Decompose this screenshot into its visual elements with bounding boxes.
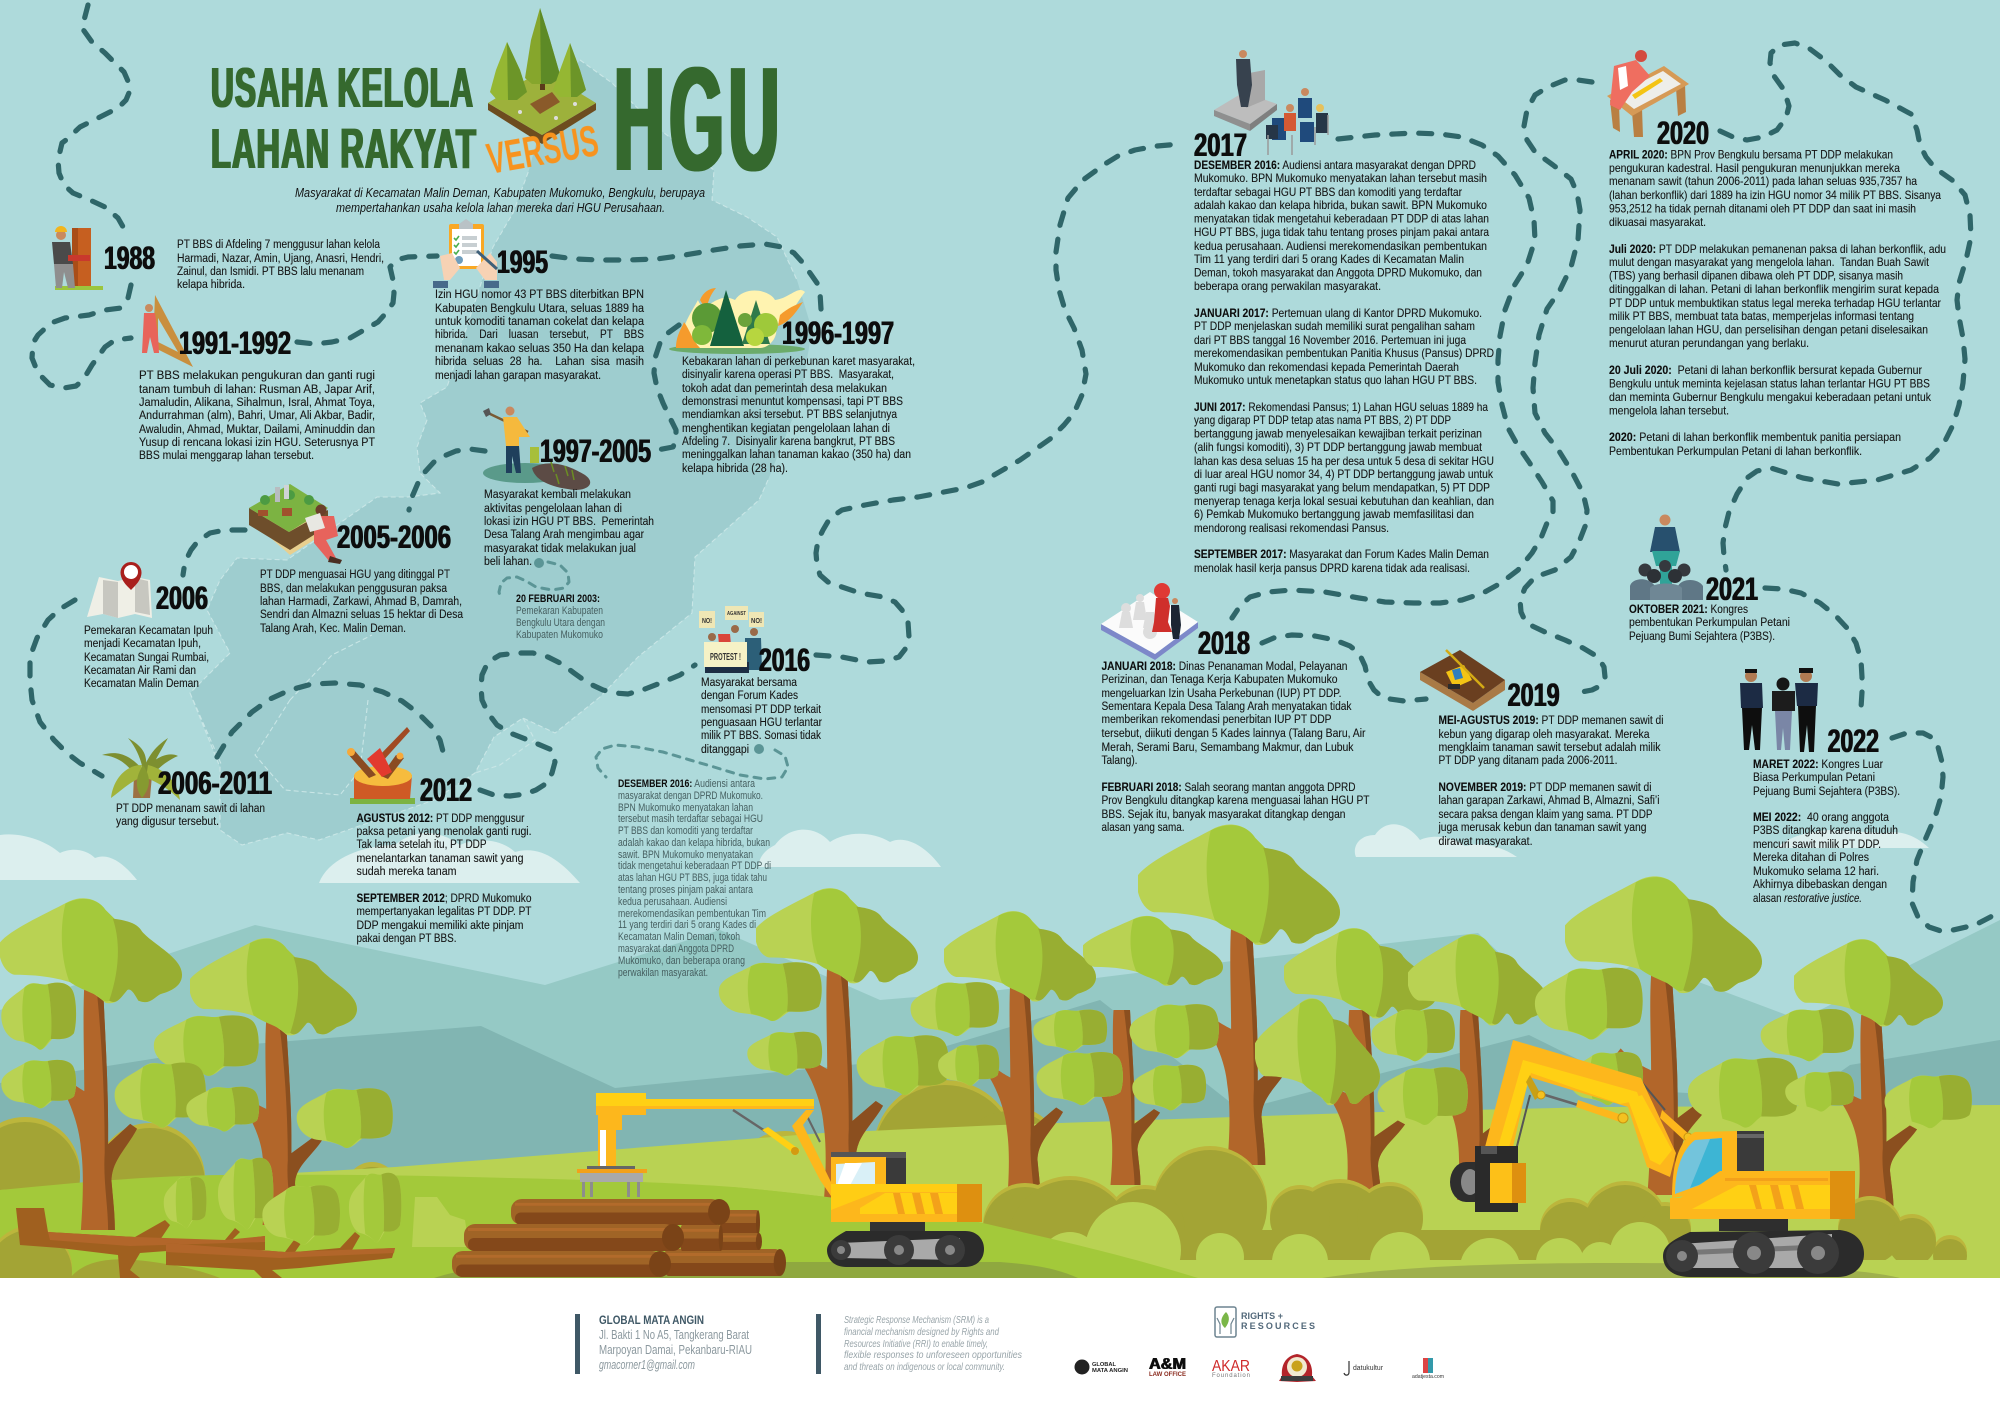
text block: yang digusur tersebut. — [116, 814, 219, 828]
text block: aktivitas pengelolaan lahan di — [484, 501, 622, 515]
note: 20 februari 2003: Kabupaten Mukomuko — [516, 629, 603, 641]
text block: Deman, tokoh masyarakat dan Anggota DPRD Mukomuko, dan — [1194, 266, 1482, 280]
text block: Jamaludin, Alikana, Sihalmun, Isral, Ahmat Toya, — [139, 395, 375, 409]
year heading: 2006-2011 — [158, 765, 272, 801]
text block — [1102, 659, 1370, 834]
text block: secara paksa dengan klaim yang sama. PT DDP — [1438, 807, 1652, 821]
text block: dirawat masyarakat. — [1438, 834, 1532, 848]
note: desember 2016: atas lahan HGU PT BBS, juga tidak tahu — [618, 872, 767, 884]
text block: DDP mengakui memiliki akte pinjam — [356, 918, 524, 932]
text block: Sementara Kepala Desa Talang Arah menyatakan tidak — [1102, 699, 1352, 713]
footer: SRM note: flexible responses to unforeseen opportunities — [844, 1349, 1023, 1361]
year heading: 2005-2006 — [337, 519, 451, 555]
panel: 2022 — [1740, 668, 1900, 905]
year heading: 1997-2005 — [540, 433, 651, 469]
icon: chess board with businessman — [1101, 583, 1198, 660]
footer: contact: Marpoyan Damai, Pekanbaru-RIAU — [599, 1343, 752, 1357]
text block: Talang). — [1102, 753, 1138, 767]
text block: alasan restorative justice. — [1753, 891, 1862, 905]
panel: 2020 — [1607, 50, 1946, 458]
front bushes — [0, 1146, 2000, 1314]
text block: OKTOBER 2021: Kongres — [1629, 602, 1748, 616]
text block: AGUSTUS 2012: PT DDP menggusur — [356, 811, 524, 825]
text block: Masyarakat bersama — [701, 675, 797, 689]
text block: PT BBS melakukan pengukuran dan ganti rugi — [139, 368, 375, 382]
text block: NOVEMBER 2019: PT DDP memanen sawit di — [1438, 780, 1652, 794]
year heading: 2016 — [759, 642, 810, 678]
text block — [1629, 602, 1790, 643]
text block: kelapa hibrida. — [177, 277, 245, 291]
panel: 2006 — [84, 562, 213, 690]
logo: datukultur — [1344, 1361, 1384, 1375]
icon: police arresting farmer — [1740, 668, 1818, 752]
note: desember 2016: adalah kakao dan kelapa hibrida, bukan — [618, 837, 770, 849]
text block: demonstrasi menuntut kompensasi, tapi PT BBS — [682, 394, 903, 408]
hills — [0, 1105, 2000, 1278]
panel: 2012 — [347, 727, 532, 945]
text block: di luar areal HGU nomor 34, 4) PT DDP bertanggung jawab untuk — [1194, 467, 1493, 481]
text block: alasan yang sama. — [1102, 820, 1184, 834]
text block: pengukuran kadestral. Hasil pengukuran menunjukkan mereka — [1609, 161, 1900, 175]
panel: 1988 — [52, 226, 384, 291]
text block: mensomasi PT DDP terkait — [701, 702, 821, 716]
note: desember 2016: DESEMBER 2016: Audiensi antara — [618, 778, 756, 790]
text block — [1609, 148, 1946, 458]
icon: speaker on podium with audience — [1214, 50, 1328, 155]
text block: menyerap tenaga kerja lokal sesuai kebutuhan dan keahlian, dan — [1194, 494, 1494, 508]
text block: beli lahan. — [484, 554, 532, 568]
text block: mengklaim tanaman sawit tersebut adalah milik — [1438, 740, 1661, 754]
text block: (alih fungsi komoditi), 3) PT DDP bertanggung jawab membuat — [1194, 440, 1483, 454]
icon: burning forest — [669, 288, 805, 354]
text block — [84, 623, 213, 690]
text block: Zainul, dan Ismidi. PT BBS lalu menanam — [177, 264, 364, 278]
subtitle: mempertahankan usaha kelola lahan mereka dari HGU Perusahaan. — [336, 200, 665, 215]
text block: beberapa orang perwakilan masyarakat. — [1194, 279, 1381, 293]
panel: 2017 — [1194, 50, 1494, 575]
icon: surveyor at drafting table — [1607, 50, 1689, 137]
mountains — [0, 920, 2000, 1200]
text block: Kecamatan Malin Deman — [84, 676, 199, 690]
text block: Kabupaten Bengkulu Utara, seluas 1889 ha — [435, 301, 644, 315]
icon: protesters with signs — [699, 606, 764, 673]
text block: yang digarap PT DDP tetap atas nama PT BBS, 2) PT DDP — [1194, 413, 1451, 427]
text block: dan meminta Gubernur Bengkulu mengakui keberadaan petani untuk — [1609, 390, 1931, 404]
heading: usaha kelola lahan rakyat: USAHA KELOLA — [211, 56, 474, 120]
footer: SRM note: Strategic Response Mechanism (SRM) is a — [844, 1314, 989, 1326]
text block: merekomendasikan pembentukan Panitia Khusus (Pansus) DPRD — [1194, 346, 1494, 360]
panel: 1997-2005 — [483, 406, 654, 641]
text block: Mukomuko dan rekomendasi kepada Pemerintah Daerah — [1194, 360, 1459, 374]
text block — [177, 237, 384, 291]
icon: map with pin — [87, 562, 152, 618]
footer background — [0, 1278, 2000, 1414]
text block: 953,2512 ha tidak pernah ditanami oleh PT DDP dan saat ini masih — [1609, 202, 1916, 216]
logo: global mata angin: MATA ANGIN — [1092, 1368, 1128, 1374]
note: desember 2016: BPN Mukomuko menyatakan lahan — [618, 802, 753, 814]
back bushes — [0, 1080, 1213, 1243]
text block: 2020: Petani di lahan berkonflik membentuk panitia persiapan — [1609, 430, 1901, 444]
text block: pakai dengan PT BBS. — [356, 931, 456, 945]
text block: BBS, dan melakukan penggusuran paksa — [260, 581, 447, 595]
panel: 1996-1997 — [669, 288, 915, 475]
text block — [435, 287, 644, 382]
panel: 2006-2011 — [102, 738, 272, 828]
note: desember 2016: merekomendasikan pembentukan Tim — [618, 908, 766, 920]
subtitle — [295, 185, 705, 215]
text block: Pemekaran Kecamatan Ipuh — [84, 623, 213, 637]
text block: Juli 2020: PT DDP melakukan pemanenan paksa di lahan berkonflik, adu — [1609, 242, 1946, 256]
logo: adatjesta — [1412, 1358, 1444, 1380]
text block: JANUARI 2018: Dinas Penanaman Modal, Pelayanan — [1102, 659, 1348, 673]
text block: menghentikan kegiatan pengelolaan lahan di — [682, 421, 890, 435]
text block: 20 Juli 2020: Petani di lahan berkonflik bersurat kepada Gubernur — [1609, 363, 1922, 377]
text block: Mukomuko. BPN Mukomuko menyatakan lahan tersebut masih — [1194, 171, 1487, 185]
text block: Tak lama setelah itu, PT DDP — [356, 837, 486, 851]
year heading: 2017 — [1194, 127, 1247, 163]
note: desember 2016: kedua perusahaan. Audiensi — [618, 896, 727, 908]
text block — [260, 567, 463, 635]
footer: contact: Jl. Bakti 1 No A5, Tangkerang Barat — [599, 1328, 749, 1342]
year heading: 2021 — [1706, 571, 1758, 607]
text block: lahan Harmadi, Zarkawi, Ahmad B, Damrah, — [260, 594, 462, 608]
text block: memberikan rekomendasi penerbitan IUP PT DDP — [1102, 712, 1332, 726]
panel: 1995 — [433, 219, 644, 382]
year heading: 2018 — [1198, 625, 1250, 661]
subtitle: Masyarakat di Kecamatan Malin Deman, Kabupaten Mukomuko, Bengkulu, berupaya — [295, 185, 705, 200]
text block: Pejuang Bumi Sejahtera (P3BS). — [1753, 784, 1900, 798]
logo: global mata angin: GLOBAL — [1092, 1362, 1117, 1368]
title — [211, 8, 784, 215]
text block: tanam tumbuh di lahan: Rusman AB, Japar Arif, — [139, 382, 375, 396]
text block: tersebut, diikuti dengan 5 Kades lainnya (Talang Baru, Air — [1102, 726, 1366, 740]
panel: 2005-2006 — [249, 484, 463, 635]
logo: akar foundation: Foundation — [1212, 1373, 1250, 1379]
note: desember 2016: perwakilan masyarakat. — [618, 967, 708, 979]
icon: clipboard held in hands — [433, 219, 499, 288]
text block: PT DDP menguasai HGU yang ditinggal PT — [260, 567, 450, 581]
text block: FEBRUARI 2018: Salah seorang mantan anggota DPRD — [1102, 780, 1356, 794]
logo: rights and resources: RESOURCES — [1241, 1321, 1315, 1331]
text block: menanam sawit (tahun 2006-2011) pada lahan seluas 935,7357 ha — [1609, 174, 1917, 188]
text block: penguasaan HGU terlantar — [701, 715, 822, 729]
note: desember 2016: sawit. BPN Mukomuko menyatakan — [618, 849, 753, 861]
panel: 1991-1992 — [139, 295, 375, 462]
forest mulcher excavator — [1450, 1040, 1864, 1277]
icon: protesters with signs: NO! — [751, 618, 762, 625]
text block: pembentukan Perkumpulan Petani — [1629, 615, 1790, 629]
logo: a&m law office: LAW OFFICE — [1149, 1372, 1186, 1378]
note: desember 2016 — [618, 778, 771, 979]
text block — [356, 811, 532, 945]
text block: Pembentukan Perkumpulan Petani di lahan berkonflik. — [1609, 444, 1862, 458]
text block: BBS. Sejak itu, banyak masyarakat ditangkap dengan — [1102, 807, 1346, 821]
note: 20 februari 2003: Bengkulu Utara dengan — [516, 617, 605, 629]
year heading: 1988 — [104, 240, 155, 276]
footer: SRM note — [816, 1314, 1023, 1374]
text block: Tim 11 yang terdiri dari 5 orang Kades di Kecamatan Malin — [1194, 252, 1464, 266]
logo: adatjesta: adatjesta.com — [1412, 1374, 1444, 1380]
text block: Izin HGU nomor 43 PT BBS diterbitkan BPN — [435, 287, 644, 301]
text block: Kebakaran lahan di perkebunan karet masyarakat, — [682, 354, 915, 368]
note: desember 2016: tersebut masih terdaftar sebagai HGU — [618, 813, 763, 825]
text block — [484, 487, 654, 568]
text block: menjadi lahan garapan masyarakat. — [435, 368, 601, 382]
text block: HGU PT BBS, juga tidak tahu tentang proses pinjam pakai antara — [1194, 225, 1489, 239]
text block: disinyalir karena operasi PT BBS. Masyarakat, — [682, 367, 894, 381]
text block — [682, 354, 915, 475]
icon: surveyor with set square — [142, 295, 193, 367]
note: 20 februari 2003 — [516, 593, 605, 641]
text block: dari PT BBS tanggal 16 November 2016. Pertemuan ini juga — [1194, 333, 1466, 347]
text block: lahan garapan Zarkawi, Ahmad B, Almazni, Safi’i — [1438, 793, 1660, 807]
icon: protesters with signs: NO! — [702, 618, 712, 625]
text block: PT DDP yang ditanam pada 2006-2011. — [1438, 753, 1618, 767]
text block: Mereka ditahan di Polres — [1753, 850, 1869, 864]
footer: contact: GLOBAL MATA ANGIN — [599, 1313, 704, 1327]
text block: Mukomuko untuk menetapkan status quo lahan HGU PT BBS. — [1194, 373, 1477, 387]
logo: datukultur: datukultur — [1353, 1365, 1384, 1372]
icon: palm tree — [102, 738, 180, 800]
text block: menurut aturan perundangan yang berlaku. — [1609, 336, 1809, 350]
text block: milik PT BBS, membuat tata batas, memperjelas informasi tentang — [1609, 309, 1914, 323]
icon: isometric land with surveyor — [249, 484, 342, 564]
text block: PT DDP menjelaskan sudah memiliki surat pengalihan saham — [1194, 319, 1475, 333]
logo: badge — [1279, 1354, 1316, 1382]
text block: lahan kas desa seluas 15 ha per desa untuk 5 desa di sekitar HGU — [1194, 454, 1494, 468]
note: 20 februari 2003: 20 FEBRUARI 2003: — [516, 593, 600, 605]
logo: a&m law office: A&M — [1149, 1356, 1186, 1373]
text block: mempertanyakan legalitas PT DDP. PT — [356, 904, 532, 918]
logo: rights and resources: RIGHTS + — [1241, 1311, 1283, 1321]
text block: kebun yang digarap oleh masyarakat. Mereka — [1438, 727, 1650, 741]
text block: Merah, Serami Baru, Semambang Makmur, dan Lubuk — [1102, 740, 1354, 754]
clouds — [0, 824, 1929, 883]
text block: PT BBS di Afdeling 7 menggusur lahan kelola — [177, 237, 380, 251]
footer: contact — [575, 1313, 752, 1374]
note: desember 2016: PT BBS dan komoditi yang terdaftar — [618, 825, 753, 837]
icon: farmer with hoe — [483, 406, 590, 490]
text block — [116, 801, 265, 828]
note: desember 2016: Mukomuko, dan beberapa orang — [618, 955, 745, 967]
text block: Mukomuko selama 12 hari. — [1753, 864, 1879, 878]
text block: juga merusak kebun dan tanaman sawit yang — [1438, 820, 1646, 834]
text block: Talang Arah, Kec. Malin Deman. — [260, 621, 406, 635]
fallen trees — [16, 1158, 469, 1278]
year heading: 2020 — [1657, 115, 1709, 151]
text block: masyarakat tidak melakukan jual — [484, 541, 636, 555]
trees — [0, 824, 1972, 1230]
text block: pengelolaan lahan HGU, dan perselisihan dengan petani diselesaikan — [1609, 322, 1928, 336]
text block: adalah kakao dan kelapa hibrida, bukan sawit. BPN Mukomuko — [1194, 198, 1487, 212]
text block — [1194, 158, 1494, 575]
icon: speaker and audience — [1630, 514, 1703, 600]
text block: dengan Forum Kades — [701, 688, 798, 702]
text block: MARET 2022: Kongres Luar — [1753, 757, 1883, 771]
text block: Afdeling 7. Disinyalir karena bangkrut, PT BBS — [682, 434, 895, 448]
text block: BBS mulai menggarap lahan tersebut. — [139, 448, 314, 462]
year heading: 2006 — [156, 580, 208, 616]
footer: SRM note: financial mechanism designed by Rights and — [844, 1326, 1000, 1338]
text block: Desa Talang Arah mengimbau agar — [484, 527, 644, 541]
text block: SEPTEMBER 2012; DPRD Mukomuko — [356, 891, 532, 905]
text block — [701, 675, 822, 756]
text block: PT DDP menanam sawit di lahan — [116, 801, 265, 815]
text: HGU — [614, 37, 784, 202]
logo: rights and resources — [1215, 1307, 1315, 1337]
text block: kelapa hibrida (28 ha). — [682, 461, 788, 475]
note: 20 februari 2003: Pemekaran Kabupaten — [516, 605, 603, 617]
icon: worker cutting tree — [52, 226, 103, 290]
icon: axe in tree stump — [347, 727, 415, 804]
map silhouette of Bengkulu — [190, 60, 812, 845]
text block: Kecamatan Sungai Rumbai, — [84, 650, 209, 664]
year heading: 1995 — [497, 244, 548, 280]
text block: Bengkulu untuk meminta kejelasan status lahan terlantar HGU PT BBS — [1609, 376, 1930, 390]
text block: DESEMBER 2016: Audiensi antara masyarakat dengan DPRD — [1194, 158, 1476, 172]
text block: Andurrahman (alm), Bahri, Umar, Ali Akbar, Badir, — [139, 408, 375, 422]
note: desember 2016: Kecamatan Malin Deman, tokoh — [618, 931, 740, 943]
text block: bertanggung jawab menyelesaikan kewajiban terkait perizinan — [1194, 426, 1482, 440]
heading: usaha kelola lahan rakyat — [211, 56, 477, 181]
text block: Yusup di rencana lokasi izin HGU. Seterusnya PT — [139, 435, 375, 449]
icon: forest island — [488, 8, 596, 144]
text block: hibrida seluas 28 ha. Lahan sisa masih — [435, 354, 644, 368]
text block: Prov Bengkulu ditangkap karena menguasai lahan HGU PT — [1102, 793, 1370, 807]
text block: menjadi Kecamatan Ipuh, — [84, 636, 201, 650]
text block: ganti rugi bagi masyarakat yang belum mendapatkan, 5) PT DDP — [1194, 480, 1490, 494]
text block: MEI-AGUSTUS 2019: PT DDP memanen sawit di — [1438, 713, 1664, 727]
text block: menanam kakao seluas 350 Ha dan kelapa — [435, 341, 644, 355]
pile of logs — [452, 1199, 786, 1277]
panel: 2018 — [1101, 583, 1370, 834]
text block: paksa petani yang menolak ganti rugi. — [356, 824, 532, 838]
year heading: 2022 — [1828, 723, 1879, 759]
year heading: 1996-1997 — [782, 315, 894, 351]
year heading: 2019 — [1508, 677, 1560, 713]
text block: mencuri sawit milik PT DDP. — [1753, 837, 1881, 851]
heading: usaha kelola lahan rakyat: LAHAN RAKYAT — [211, 117, 477, 181]
text block: 6) Pemkab Mukomuko bertanggung jawab memfasilitasi dan — [1194, 507, 1474, 521]
text block — [1753, 757, 1900, 905]
panel: 2016 — [618, 606, 822, 979]
note: desember 2016: masyarakat dengan DPRD Mukomuko. — [618, 790, 763, 802]
text block: Pejuang Bumi Sejahtera (P3BS). — [1629, 629, 1775, 643]
text block: mendiamkan aksi tersebut. PT BBS selanjutnya — [682, 407, 897, 421]
text block — [139, 368, 375, 462]
footer: contact: gmacorner1@gmail.com — [599, 1358, 695, 1372]
text block: (TBS) yang berhasil dipanen dibawa oleh PT DDP, sisanya masih — [1609, 268, 1903, 282]
panel: 2021 — [1629, 514, 1790, 643]
text block: tokoh adat dan pemerintah desa melakukan — [682, 381, 887, 395]
note: desember 2016: masyarakat dan Anggota DPRD — [618, 943, 734, 955]
text block: menelantarkan tanaman sawit yang — [356, 851, 524, 865]
text block: Kecamatan Air Rami dan — [84, 663, 196, 677]
text block: mengelola lahan tersebut. — [1609, 404, 1729, 418]
text block: milik PT BBS. Somasi tidak — [701, 728, 822, 742]
text block: Harmadi, Nazar, Amin, Ujang, Anasri, Hendri, — [177, 251, 384, 265]
year heading: 2012 — [420, 772, 472, 808]
logo: global mata angin — [1074, 1360, 1128, 1374]
text block: mulut dengan masyarakat yang mengelola lahan. Tandan Buah Sawit — [1609, 255, 1930, 269]
panel: 2019 — [1420, 650, 1664, 848]
text block: Sendri dan Almazni seluas 15 hektar di Desa — [260, 607, 463, 621]
text block: mendorong realisasi rekomendasi Pansus. — [1194, 521, 1389, 535]
log loader excavator — [577, 1093, 984, 1267]
dashed timeline path — [30, 5, 2000, 931]
text block: P3BS ditangkap karena dituduh — [1753, 823, 1898, 837]
text block: Awaludin, Ahmad, Muktar, Dailami, Aminuddin dan — [139, 422, 375, 436]
note: desember 2016: 11 yang terdiri dari 5 orang Kades di — [618, 919, 756, 931]
icon: protesters with signs: AGAINST — [727, 611, 746, 617]
note: desember 2016: tentang proses pinjam pakai antara — [618, 884, 754, 896]
text block: Akhirnya dibebaskan dengan — [1753, 877, 1887, 891]
text block: MEI 2022: 40 orang anggota — [1753, 810, 1889, 824]
text block: dikuasai masyarakat. — [1609, 215, 1706, 229]
heading: versus: VERSUS — [483, 116, 602, 184]
text block: hibrida. Dari luasan tersebut, PT BBS — [435, 327, 644, 341]
note: desember 2016: tidak mengetahui keberadaan PT DDP di — [618, 860, 771, 872]
text block: Masyarakat kembali melakukan — [484, 487, 631, 501]
text block: (lahan berkonflik) dari 1889 ha izin HGU nomor 34 milik PT BBS. Sisanya — [1609, 188, 1941, 202]
text block: terdaftar sebagai HGU PT BBS dan komoditi yang terdaftar — [1194, 185, 1462, 199]
text block: Biasa Perkumpulan Petani — [1753, 770, 1875, 784]
text block: meninggalkan lahan tanaman kakao (350 ha) dan — [682, 447, 911, 461]
text block: sudah mereka tanam — [356, 864, 456, 878]
logos row — [1074, 1354, 1444, 1382]
text block: PT DDP untuk membuktikan status legal mereka terhadap HGU terlantar — [1609, 296, 1941, 310]
text block: Perizinan, dan Tenaga Kerja Kabupaten Mukomuko — [1102, 672, 1338, 686]
text block: ditinggalkan di lahan. Petani di lahan berkonflik mengirim surat kepada — [1609, 282, 1939, 296]
year heading: 1991-1992 — [179, 325, 291, 361]
text block: mengeluarkan Izin Usaha Perkebunan (IUP) PT DDP. — [1102, 686, 1342, 700]
text block: JUNI 2017: Rekomendasi Pansus; 1) Lahan HGU seluas 1889 ha — [1194, 400, 1488, 414]
footer: SRM note: Resources Initiative (RRI) to enable timely, — [844, 1338, 988, 1350]
text block: menyatakan tidak mengetahui keberadaan PT DDP di atas lahan — [1194, 212, 1489, 226]
icon: protesters with signs: PROTEST ! — [710, 652, 741, 663]
text block: kedua perusahaan. Audiensi merekomendasikan pembentukan — [1194, 239, 1487, 253]
logo: akar foundation: AKAR — [1212, 1358, 1250, 1375]
text block — [1438, 713, 1664, 848]
text block: lokasi izin HGU PT BBS. Pemerintah — [484, 514, 654, 528]
text block: menolak hasil kerja pansus DPRD karena tidak ada realisasi. — [1194, 561, 1470, 575]
footer: SRM note: and threats on indigenous or local community. — [844, 1361, 1005, 1373]
text block: APRIL 2020: BPN Prov Bengkulu bersama PT DDP melakukan — [1609, 148, 1893, 162]
text block: ditanggapi — [701, 742, 749, 756]
icon: excavator on plot of land — [1420, 650, 1505, 711]
text block: JANUARI 2017: Pertemuan ulang di Kantor DPRD Mukomuko. — [1194, 306, 1482, 320]
text block: untuk komoditi tanaman cokelat dan kelapa — [435, 314, 644, 328]
text block: SEPTEMBER 2017: Masyarakat dan Forum Kades Malin Deman — [1194, 547, 1489, 561]
